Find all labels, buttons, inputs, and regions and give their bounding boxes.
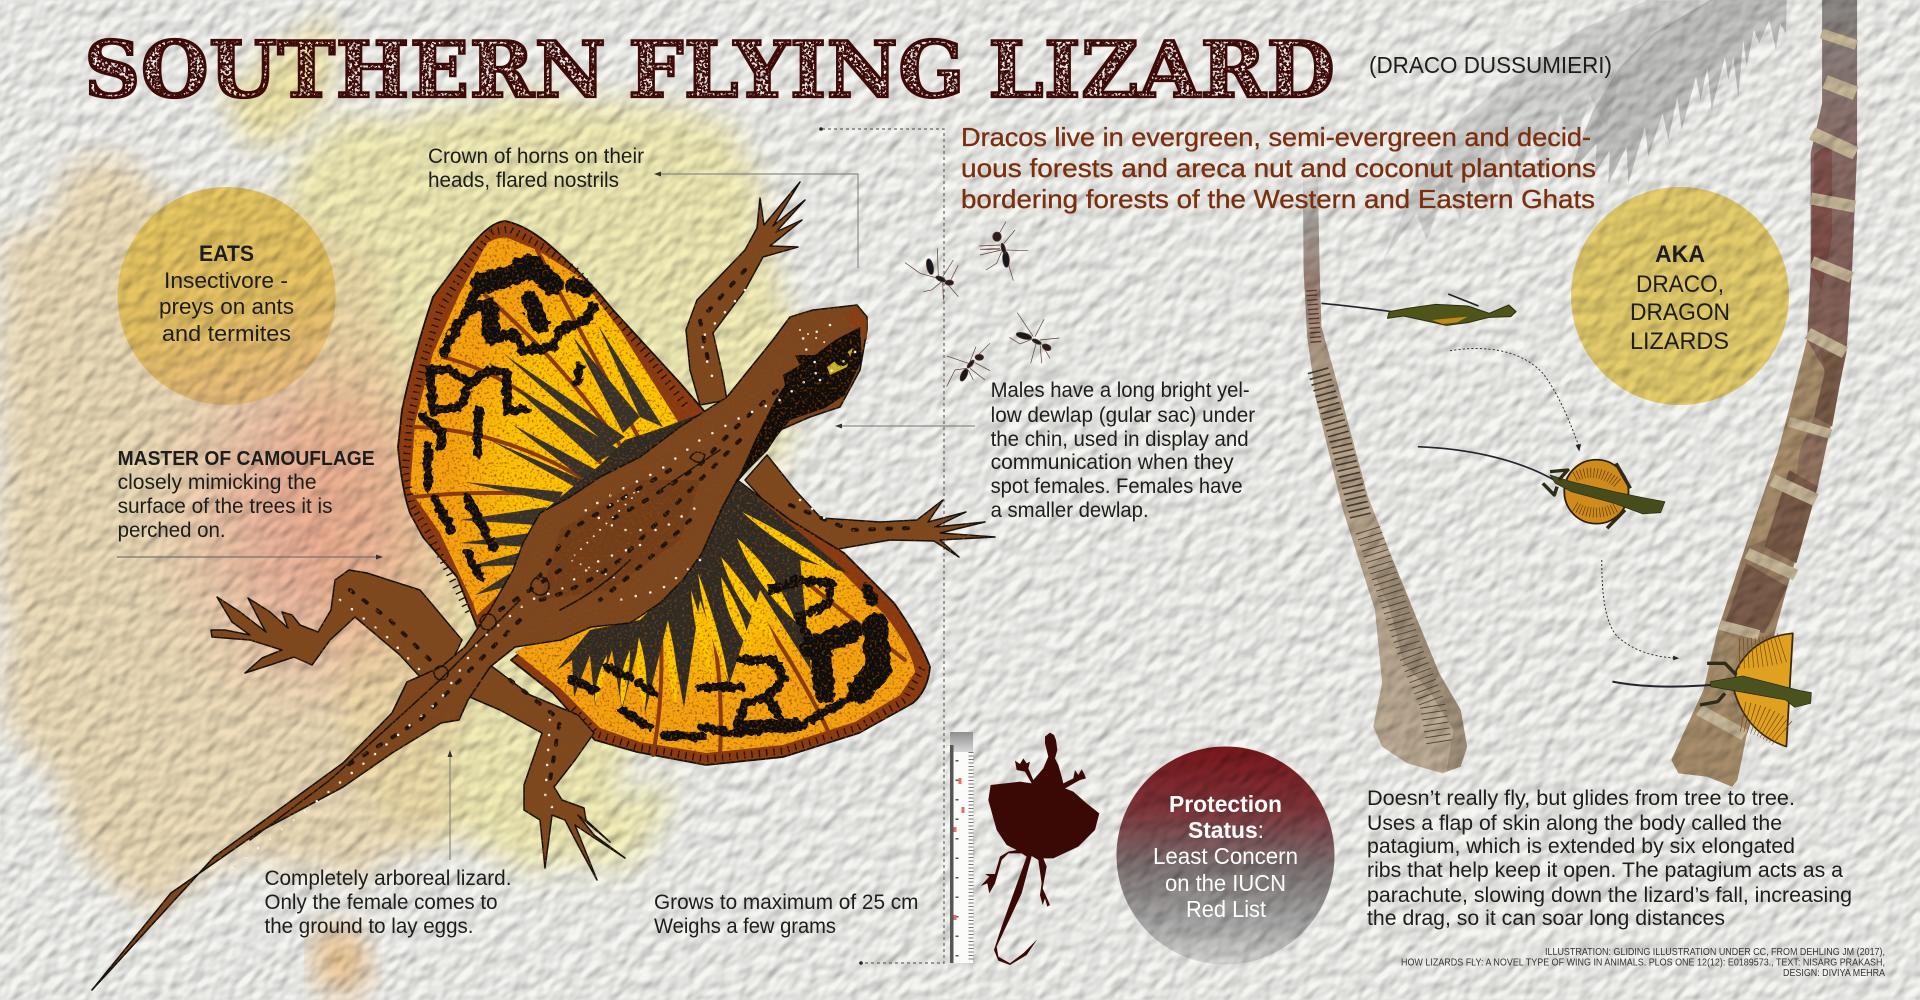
camouflage text <box>118 448 375 542</box>
ant 2 <box>979 222 1028 281</box>
aka text: DRACO, <box>1636 271 1724 298</box>
dewlap text: spot females. Females have <box>991 475 1243 498</box>
arboreal text: Completely arboreal lizard. <box>264 867 512 890</box>
ants <box>905 222 1059 387</box>
gliding sequence <box>1321 294 1811 747</box>
size text <box>654 891 918 938</box>
protection status text: Status: <box>1188 817 1264 843</box>
aka text <box>1630 241 1730 355</box>
arrow: arboreal <box>448 750 452 860</box>
gliding explanation text: Doesn’t really fly, but glides from tree to tree. <box>1367 787 1795 810</box>
ant 1 <box>905 248 958 300</box>
upper wing black blotches <box>423 265 593 577</box>
dewlap text: Males have a long bright yel- <box>991 379 1250 402</box>
arrow: dewlap <box>835 424 975 428</box>
coconut tree trunks <box>1303 0 1857 787</box>
left trunk <box>1303 177 1467 773</box>
size text: Grows to maximum of 25 cm <box>654 891 918 914</box>
gliding explanation text: the drag, so it can soar long distances <box>1367 907 1725 930</box>
dewlap text: communication when they <box>991 451 1234 474</box>
upper foreleg <box>686 182 805 405</box>
ant 4 <box>947 343 990 387</box>
gliding explanation text <box>1367 787 1852 930</box>
arboreal text <box>264 867 512 938</box>
right trunk <box>1671 0 1857 787</box>
crown callout text: Crown of horns on their <box>428 145 644 168</box>
circle: protection status <box>1116 746 1334 964</box>
body markings <box>230 270 910 870</box>
watercolour wash <box>0 12 800 993</box>
eats text: Insectivore - <box>164 268 288 293</box>
lower wing <box>511 480 930 765</box>
aka text: LIZARDS <box>1630 328 1729 355</box>
gliding explanation text: ribs that help keep it open. The patagium acts as a <box>1367 859 1843 882</box>
upper wing <box>398 221 705 627</box>
crown callout text: heads, flared nostrils <box>428 169 619 192</box>
title: SOUTHERN <box>84 25 606 116</box>
credits: DESIGN: DIVIYA MEHRA <box>1783 968 1885 979</box>
curved arrow 1 <box>1450 349 1581 452</box>
lower wing black blotches <box>572 580 878 737</box>
title: LIZARD <box>988 25 1335 116</box>
crown callout text <box>428 145 644 192</box>
credits: ILLUSTRATION: GLIDING ILLUSTRATION UNDER CC, FROM DEHLING JM (2017), <box>1545 947 1885 958</box>
eats text <box>159 241 294 346</box>
habitat text: Dracos live in evergreen, semi-evergreen and decid- <box>961 122 1591 152</box>
habitat text: uous forests and areca nut and coconut plantations <box>961 153 1596 183</box>
title: FLYING <box>628 25 965 116</box>
size silhouette <box>981 733 1099 965</box>
arrow: camouflage <box>117 554 383 560</box>
eats text: EATS <box>199 241 254 266</box>
dewlap text: a smaller dewlap. <box>991 499 1149 522</box>
head dark mask and eye <box>735 307 867 485</box>
camouflage text: MASTER OF CAMOUFLAGE <box>118 448 375 470</box>
arboreal text: the ground to lay eggs. <box>264 915 474 938</box>
protection status text: Protection <box>1169 791 1282 817</box>
dewlap text <box>991 379 1255 522</box>
camouflage text: perched on. <box>118 519 226 542</box>
protection status text: Red List <box>1186 896 1267 922</box>
credits <box>1401 947 1885 979</box>
main lizard illustration <box>92 182 995 990</box>
protection status text: Least Concern <box>1153 843 1298 869</box>
left hind leg <box>211 570 462 690</box>
eats text: preys on ants <box>159 294 294 319</box>
gliding explanation text: patagium, which is extended by six elongated <box>1367 835 1795 858</box>
arboreal text: Only the female comes to <box>264 891 498 914</box>
glide stage 2 <box>1418 447 1665 528</box>
gliding explanation text: parachute, slowing down the lizard’s fall, increasing <box>1367 884 1852 907</box>
ant 3 <box>1009 313 1059 363</box>
protection status text <box>1153 791 1298 922</box>
aka text: AKA <box>1655 241 1705 268</box>
size text: Weighs a few grams <box>654 915 836 938</box>
camouflage text: closely mimicking the <box>118 471 317 494</box>
aka text: DRAGON <box>1630 299 1730 326</box>
circle: eats <box>118 187 336 405</box>
gliding explanation text: Uses a flap of skin along the body called the <box>1367 812 1782 835</box>
circle: aka <box>1571 187 1789 405</box>
subtitle: scientific name: (DRACO DUSSUMIERI) <box>1369 52 1612 78</box>
dotted frame line <box>819 127 944 965</box>
right foreleg <box>745 455 995 557</box>
curved arrow 2 <box>1602 560 1679 660</box>
arrow: crown <box>654 172 858 268</box>
glide stage 1 <box>1321 294 1516 325</box>
habitat text: bordering forests of the Western and Eastern Ghats <box>961 184 1595 214</box>
ruler <box>950 732 973 963</box>
palm fronds <box>1383 0 1787 260</box>
lizard body and tail <box>92 305 867 990</box>
dewlap text: the chin, used in display and <box>991 428 1249 451</box>
eats text: and termites <box>162 321 291 346</box>
habitat text <box>961 122 1596 214</box>
right hind leg <box>465 665 625 880</box>
glide stage 3 <box>1612 633 1811 747</box>
dewlap text: low dewlap (gular sac) under <box>991 404 1255 427</box>
protection status text: on the IUCN <box>1165 870 1286 896</box>
camouflage text: surface of the trees it is <box>118 495 333 518</box>
